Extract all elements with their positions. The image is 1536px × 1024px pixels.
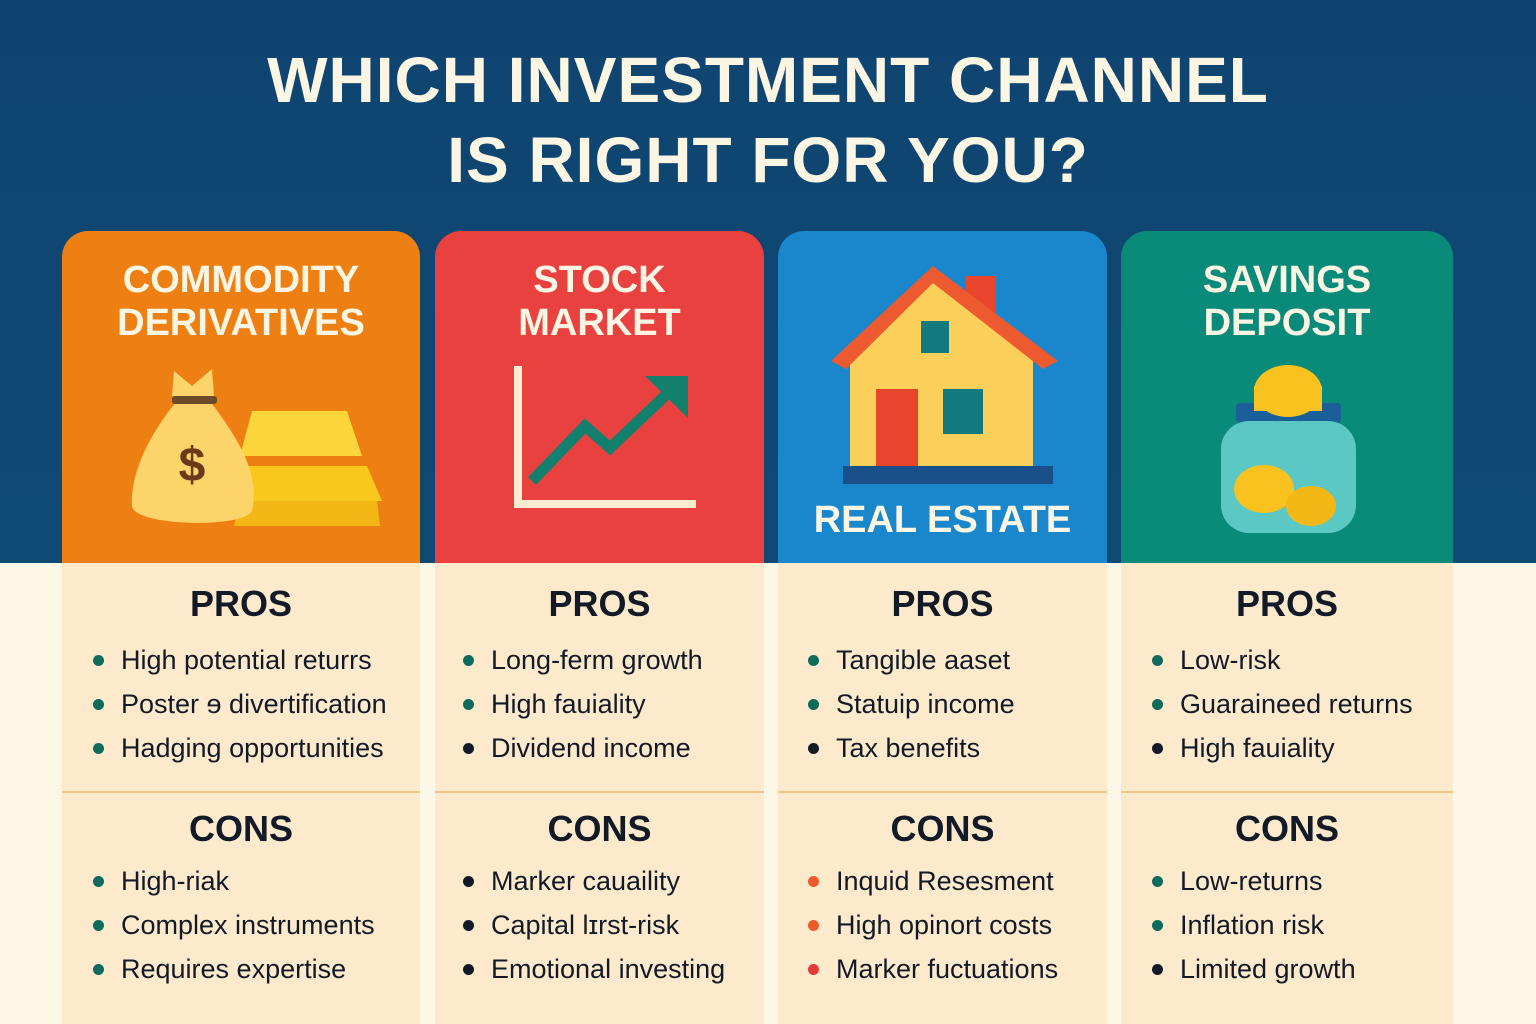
pros list (1152, 645, 1413, 763)
pros list: Tangible aaset (836, 645, 1010, 675)
cons list: Capital lɪrst-risk (491, 910, 679, 940)
panel: stock market (435, 231, 764, 1024)
pros list: Low-risk (1180, 645, 1281, 675)
title (267, 44, 1269, 196)
cons list: Inflation risk (1180, 910, 1324, 940)
pros heading: PROS (891, 583, 994, 624)
pros list: Guaraineed returns (1180, 689, 1413, 719)
pros list: Dividend income (491, 733, 691, 763)
icon: money bag and gold: $ (179, 439, 206, 492)
heading: stock: MARKET (518, 302, 681, 344)
cons list: High-riak (121, 866, 229, 896)
icon: money bag and gold (132, 369, 382, 526)
cons list: Marker fuctuations (836, 954, 1058, 984)
icon: chart arrow (514, 366, 696, 508)
pros list (93, 645, 387, 763)
pros list: Long-ferm growth (491, 645, 703, 675)
cons list (808, 866, 1058, 984)
pros list: Hadging opportunities (121, 733, 384, 763)
title: IS RIGHT FOR YOU? (447, 124, 1089, 196)
heading: commodity (117, 259, 365, 344)
heading: savings (1203, 259, 1371, 344)
panel: commodity derivatives (62, 231, 420, 1024)
cons list (93, 866, 375, 984)
pros list: Statuip income (836, 689, 1015, 719)
icon: jar with coins (1221, 365, 1356, 533)
cons list: High opinort costs (836, 910, 1052, 940)
cons heading: CONS (189, 808, 293, 849)
heading: stock (518, 259, 681, 344)
cons list (1152, 866, 1356, 984)
pros list: Tax benefits (836, 733, 980, 763)
cons list: Inquid Resesment (836, 866, 1054, 896)
pros heading: PROS (190, 583, 292, 624)
heading: real estate: REAL ESTATE (814, 499, 1071, 541)
heading: commodity: COMMODITY (123, 259, 359, 301)
pros list: High potential returrs (121, 645, 372, 675)
pros list: High fauiality (491, 689, 646, 719)
cons heading: CONS (547, 808, 652, 849)
cons list: Emotional investing (491, 954, 725, 984)
heading: commodity: DERIVATIVES (117, 302, 365, 344)
cons heading: CONS (1235, 808, 1339, 849)
pros list: High fauiality (1180, 733, 1335, 763)
pros heading: PROS (548, 583, 651, 624)
cons list: Low-returns (1180, 866, 1323, 896)
cons list: Limited growth (1180, 954, 1356, 984)
panel: real estate (778, 231, 1107, 1024)
cons list (463, 866, 725, 984)
cons heading: CONS (890, 808, 994, 849)
cons list: Requires expertise (121, 954, 346, 984)
pros list (463, 645, 703, 763)
pros list: Poster ɘ divertification (121, 689, 387, 719)
cons list: Marker cauaility (491, 866, 680, 896)
icon: house (831, 266, 1058, 484)
pros heading: PROS (1236, 583, 1338, 624)
heading: savings: SAVINGS (1203, 259, 1371, 301)
cons list: Complex instruments (121, 910, 375, 940)
panel: savings deposit (1121, 231, 1453, 1024)
heading: savings: DEPOSIT (1204, 302, 1370, 344)
pros list (808, 645, 1015, 763)
heading: stock: STOCK (533, 259, 666, 301)
title: WHICH INVESTMENT CHANNEL (267, 44, 1269, 116)
